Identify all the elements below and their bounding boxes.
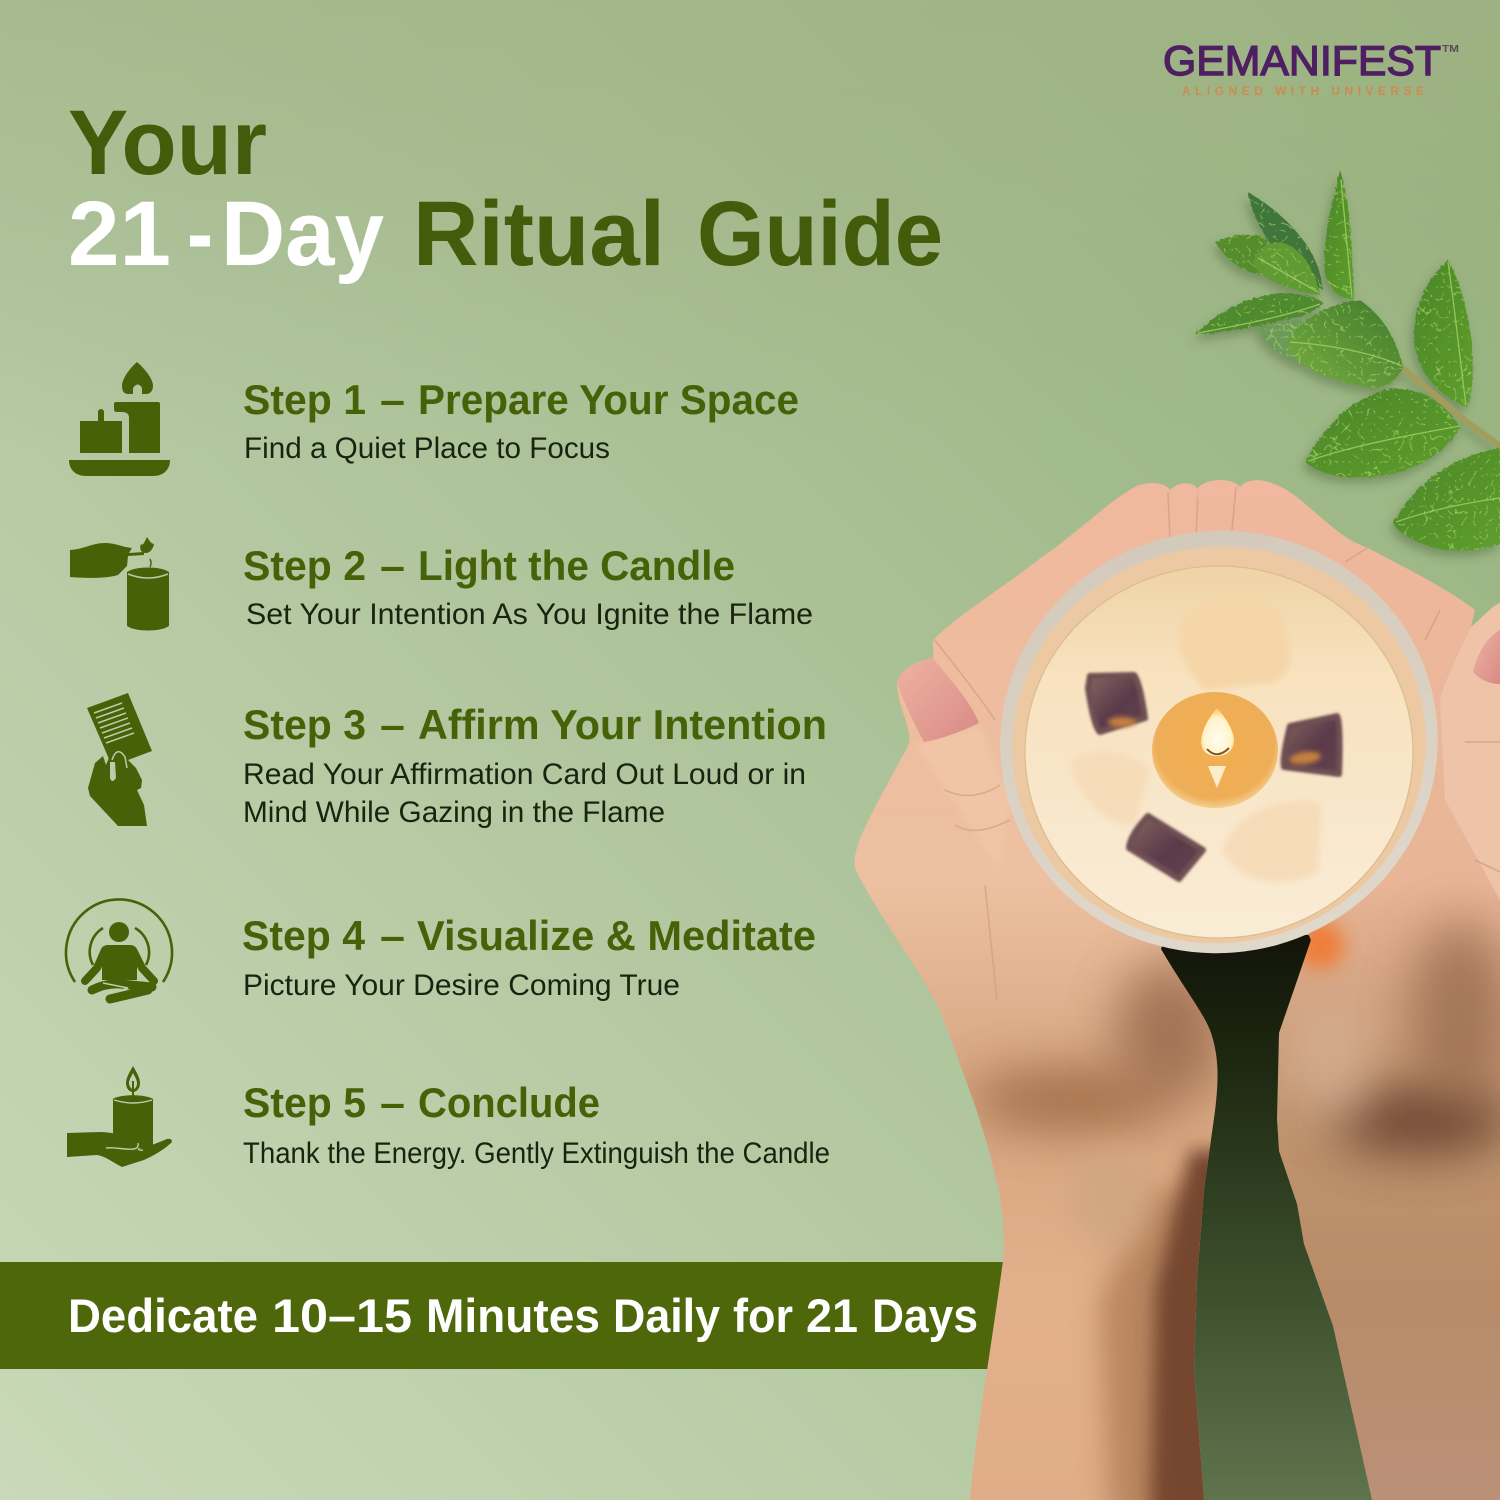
logo: TM bbox=[1442, 44, 1459, 55]
icon: candles on a tray bbox=[69, 362, 170, 476]
banner: 21 bbox=[806, 1289, 858, 1342]
left hand shading bbox=[915, 725, 1230, 1500]
step 4 text: Picture Your Desire Coming True bbox=[243, 969, 680, 1002]
step 5 text: Conclude bbox=[418, 1079, 600, 1126]
candle bbox=[967, 496, 1471, 988]
step 1 text: Step 1 bbox=[243, 376, 366, 423]
mint leaves bbox=[1195, 170, 1500, 551]
flame bbox=[1201, 708, 1234, 756]
left hand bbox=[854, 483, 1218, 1500]
step 5 text: – bbox=[380, 1079, 405, 1126]
step 5 text bbox=[243, 1079, 830, 1170]
step 3 text bbox=[243, 701, 827, 829]
step 2 text bbox=[243, 542, 813, 631]
title: 21 bbox=[68, 183, 171, 285]
wax crystals bbox=[1070, 595, 1322, 882]
step 4 text: Visualize & Meditate bbox=[417, 912, 816, 959]
left hand creases bbox=[935, 490, 1198, 1000]
title: Guide bbox=[697, 183, 943, 285]
title: - bbox=[187, 183, 213, 285]
icon: hand holding affirmation card bbox=[87, 693, 152, 826]
melt pool bbox=[1152, 692, 1278, 808]
step 2 text: Light the Candle bbox=[418, 542, 735, 589]
step 3 text: Step 3 bbox=[243, 701, 366, 748]
step 1 text: Prepare Your Space bbox=[418, 376, 799, 423]
step 2 text: Set Your Intention As You Ignite the Flame bbox=[246, 598, 813, 631]
step 3 text: Mind While Gazing in the Flame bbox=[243, 796, 665, 829]
banner: Days bbox=[872, 1289, 978, 1342]
right hand bbox=[1190, 470, 1500, 1500]
step 3 text: Affirm Your Intention bbox=[418, 701, 827, 748]
title bbox=[68, 92, 943, 285]
title: Ritual bbox=[413, 183, 665, 285]
title: Day bbox=[221, 183, 384, 285]
step 5 text: Thank the Energy. Gently Extinguish the Candle bbox=[243, 1137, 830, 1170]
icon: hand lighting a candle bbox=[70, 537, 169, 630]
icon: meditating figure bbox=[66, 899, 172, 999]
candle wax bbox=[1025, 566, 1413, 938]
banner: Minutes bbox=[426, 1289, 600, 1342]
banner: Daily bbox=[613, 1289, 720, 1342]
shadow gap between hands bbox=[1150, 935, 1400, 1500]
step 4 text bbox=[242, 912, 816, 1002]
banner: for bbox=[733, 1289, 793, 1342]
step 4 text: Step 4 bbox=[242, 912, 366, 959]
mint stem bbox=[1400, 366, 1500, 446]
step 2 text: Step 2 bbox=[243, 542, 366, 589]
step 1 text: Find a Quiet Place to Focus bbox=[244, 432, 610, 465]
step 3 text: – bbox=[380, 701, 405, 748]
candle jar rim bbox=[967, 496, 1471, 988]
step 2 text: – bbox=[380, 542, 405, 589]
banner: Dedicate bbox=[68, 1289, 258, 1342]
banner: 10–15 bbox=[272, 1289, 412, 1342]
step 4 text: – bbox=[380, 912, 405, 959]
icon: candle on an open hand bbox=[67, 1066, 172, 1167]
step 3 text: Read Your Affirmation Card Out Loud or in bbox=[243, 758, 806, 791]
banner bbox=[0, 1262, 1003, 1369]
logo: ALIGNED WITH UNIVERSE bbox=[1182, 84, 1424, 98]
logo: GEMANIFEST bbox=[1163, 37, 1441, 84]
step 1 text bbox=[243, 376, 799, 465]
right hand creases bbox=[1232, 487, 1500, 872]
step 1 text: – bbox=[380, 376, 405, 423]
mint leaf veins bbox=[1198, 180, 1500, 522]
title: Your bbox=[68, 92, 267, 194]
nails bbox=[897, 630, 1500, 742]
right hand shading bbox=[1290, 600, 1500, 1155]
step 5 text: Step 5 bbox=[243, 1079, 366, 1126]
amethyst stones bbox=[1088, 675, 1340, 879]
mint sprig bbox=[1195, 170, 1500, 551]
